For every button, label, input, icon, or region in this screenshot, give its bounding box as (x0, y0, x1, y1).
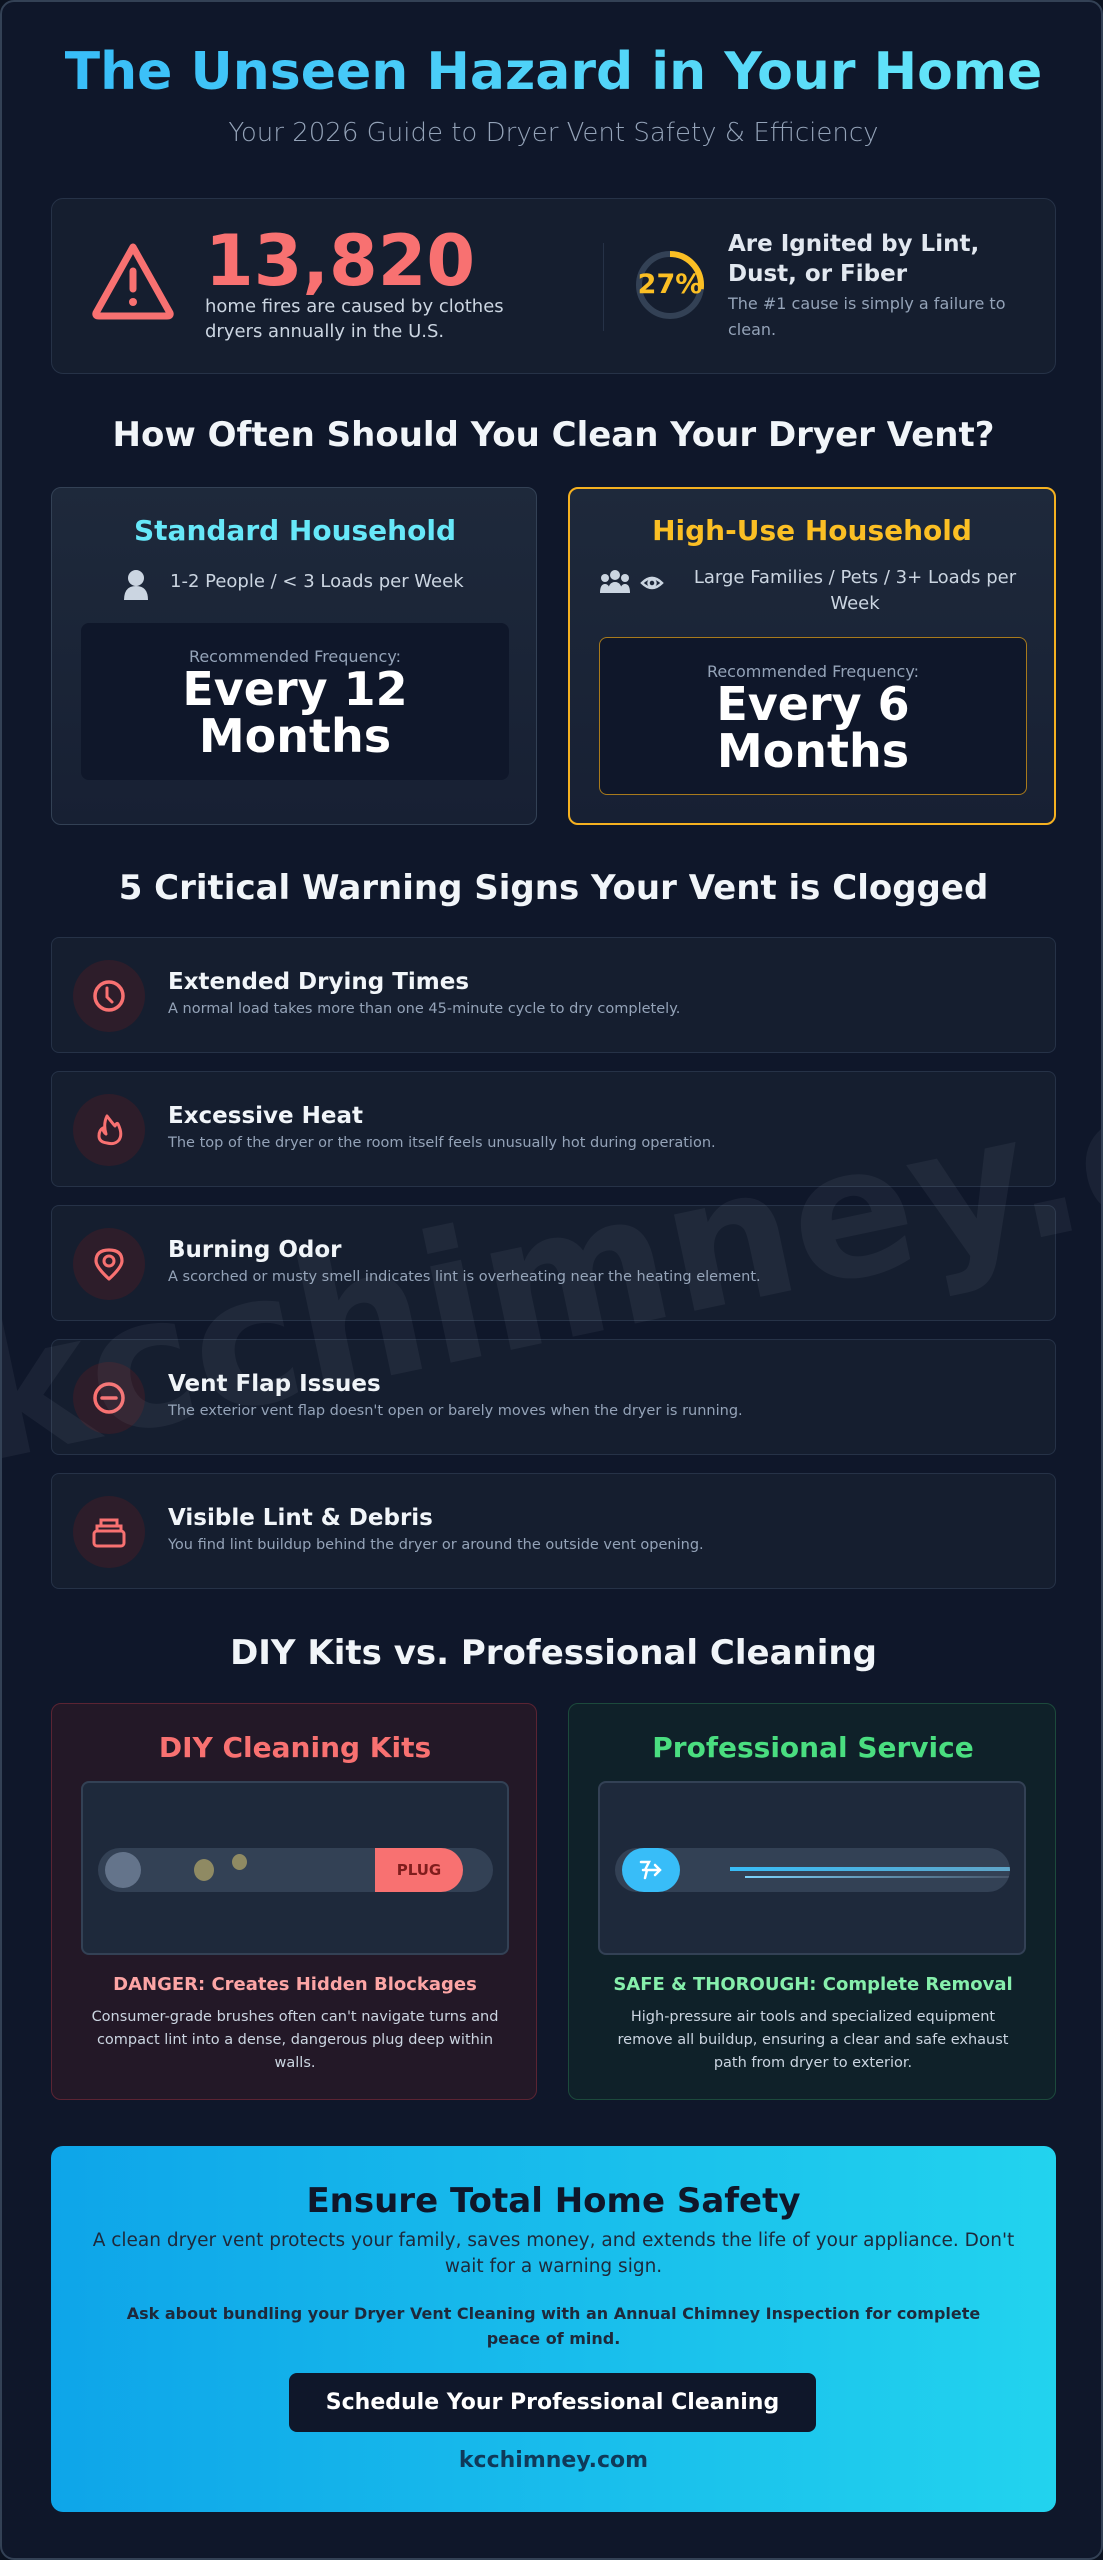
icons: family and eye (600, 570, 664, 593)
panel: professional (568, 1703, 1056, 2100)
frequency box: Recommended Frequency: (189, 647, 401, 666)
warning: extended drying (51, 937, 1056, 1053)
button: Schedule Your Professional Cleaning (326, 2390, 779, 2415)
cta bundle text: Ask about bundling your Dryer Vent Cleaning with an Annual Chimney Inspection for complete (127, 2304, 980, 2323)
chart: 27% ring (636, 251, 704, 319)
panel: standard household (51, 487, 537, 825)
illustration: clogged pipe: PLUG (397, 1861, 441, 1879)
warning: vent flap: Vent Flap Issues (168, 1371, 381, 1397)
warning: extended drying: A normal load takes more than one 45-minute cycle to dry completely. (168, 1001, 680, 1017)
icon: minus circle (73, 1362, 145, 1434)
cta bundle text (126, 2304, 980, 2348)
frequency box: Months (199, 709, 391, 763)
warning: extended drying: Extended Drying Times (168, 969, 469, 995)
frequency box: Every 12 (182, 662, 408, 716)
icon: clock (73, 960, 145, 1032)
info text: 1-2 People / < 3 Loads per Week (170, 571, 464, 592)
frequency box: Months (717, 724, 909, 778)
icon: pin (73, 1228, 145, 1300)
illustration: clogged pipe (81, 1781, 509, 1955)
cta text: A clean dryer vent protects your family, saves money, and extends the life of your appliance. Don't wait for a warning sign. (93, 2230, 1014, 2277)
stat text: ignited (728, 231, 979, 287)
frequency box (81, 623, 509, 780)
panel: DIY kits (51, 1703, 537, 2100)
button (289, 2373, 816, 2432)
icon: flame (73, 1094, 145, 1166)
warning: visible lint: Visible Lint & Debris (168, 1505, 433, 1531)
description: Consumer-grade brushes often can't navigate turns and compact lint into a dense, dangerous plug deep within walls. (92, 2009, 498, 2071)
warning: burning odor: A scorched or musty smell indicates lint is overheating near the heating element. (168, 1269, 761, 1285)
frequency box (599, 637, 1027, 795)
stat sub: The #1 cause is simply a failure to (728, 294, 1006, 313)
card title: High-Use Household (652, 514, 972, 547)
cta bundle text: peace of mind. (487, 2329, 620, 2348)
icon: person (124, 570, 148, 600)
card title: Professional Service (652, 1731, 974, 1764)
icon: layers (73, 1496, 145, 1568)
heading: warning signs: 5 Critical Warning Signs Your Vent is Clogged (119, 868, 988, 908)
stat description: dryers annually in the U.S. (205, 321, 444, 342)
stat description: home fires are caused by clothes (205, 296, 504, 317)
frequency box: Recommended Frequency: (707, 662, 919, 681)
caption: SAFE & THOROUGH: Complete Removal (613, 1974, 1013, 1995)
icon: warning (92, 244, 174, 320)
panel: stats (51, 198, 1056, 374)
cta heading: Ensure Total Home Safety (306, 2181, 801, 2221)
chart: 27% ring: 27% (638, 269, 702, 300)
card title: DIY Cleaning Kits (159, 1731, 431, 1764)
card title: Standard Household (134, 514, 456, 547)
warning: vent flap: The exterior vent flap doesn't open or barely moves when the dryer is running. (168, 1403, 743, 1419)
warning: excessive heat: Excessive Heat (168, 1103, 363, 1129)
warning: burning odor: Burning Odor (168, 1237, 342, 1263)
warning: vent flap (51, 1339, 1056, 1455)
heading: how often: How Often Should You Clean Your Dryer Vent? (113, 415, 994, 455)
title: The Unseen Hazard in Your Home (65, 42, 1042, 102)
warning: visible lint (51, 1473, 1056, 1589)
panel: call to action (51, 2146, 1056, 2512)
frequency box: Every 6 (716, 677, 910, 731)
stat description (205, 296, 504, 342)
heading: diy vs pro: DIY Kits vs. Professional Cleaning (230, 1633, 877, 1673)
description: High-pressure air tools and specialized equipment remove all buildup, ensuring a clear and safe exhaust path from dryer to exterior. (618, 2009, 1008, 2071)
illustration: clear pipe (598, 1781, 1026, 1955)
warning: visible lint: You find lint buildup behind the dryer or around the outside vent opening. (168, 1537, 704, 1553)
stat sub (728, 294, 1006, 339)
panel: high-use household (568, 487, 1056, 825)
stat sub: clean. (728, 320, 776, 339)
info text: Large Families / Pets / 3+ Loads per Week (694, 567, 1016, 614)
warning: excessive heat: The top of the dryer or the room itself feels unusually hot during operation. (168, 1135, 716, 1151)
caption: DANGER: Creates Hidden Blockages (113, 1974, 477, 1995)
warning: excessive heat (51, 1071, 1056, 1187)
stat text: ignited: Are Ignited by Lint, (728, 231, 979, 257)
subtitle: Your 2026 Guide to Dryer Vent Safety & Efficiency (228, 118, 879, 148)
website: kcchimney.com (459, 2448, 648, 2473)
warning: burning odor (51, 1205, 1056, 1321)
stat: 13,820: 13,820 (205, 220, 475, 302)
stat text: ignited: Dust, or Fiber (728, 261, 907, 287)
